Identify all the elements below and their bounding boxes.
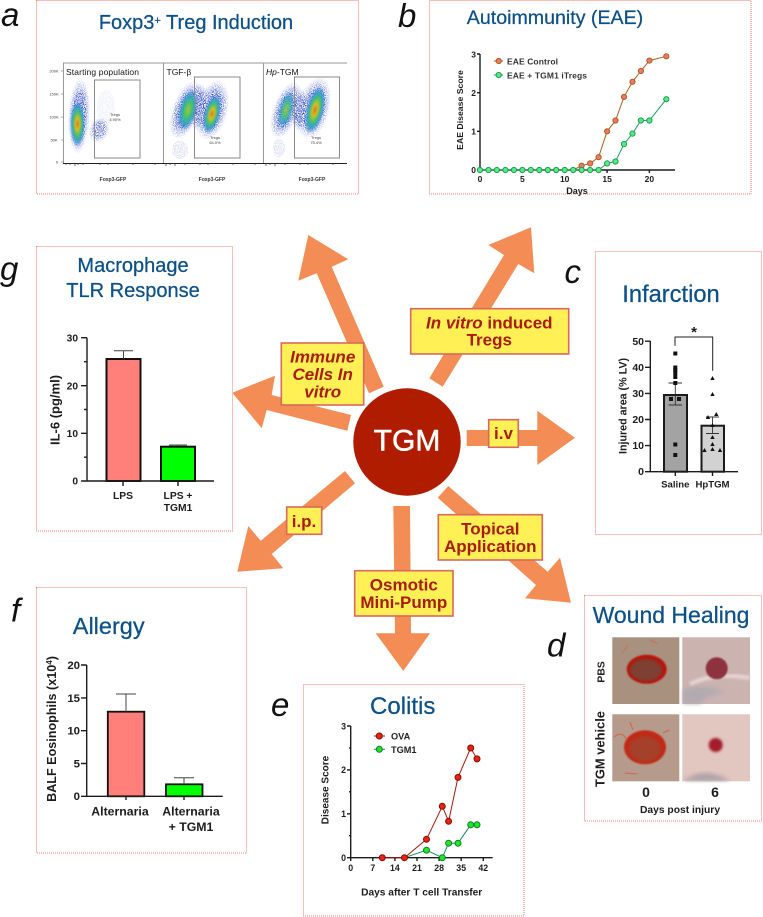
line chart colitis: 14 xyxy=(390,863,400,873)
plot 1 starting population: Foxp3-GFP xyxy=(100,177,127,183)
heading f: Allergy xyxy=(73,613,145,639)
arrow to infarction xyxy=(467,411,575,465)
flow y axis labels: 50K xyxy=(50,138,58,142)
TGM circle xyxy=(353,388,461,496)
bar chart IL-6: IL-6 (pg/ml) xyxy=(48,375,62,445)
bar chart eosinophils: 10 xyxy=(67,726,80,738)
line chart colitis: 1 xyxy=(341,809,346,819)
line chart colitis xyxy=(320,722,493,899)
bar chart eosinophils xyxy=(45,656,223,834)
bar chart eosinophils: 0 xyxy=(74,791,80,803)
line chart EAE: 0 xyxy=(471,165,476,175)
heading b: Autoimmunity (EAE) xyxy=(467,7,643,29)
label i.v: i.v xyxy=(494,424,513,443)
label topical application: Application xyxy=(444,537,537,556)
bar chart IL-6: 20 xyxy=(67,382,78,392)
legend EAE: EAE Control xyxy=(507,56,558,66)
bar chart IL-6 xyxy=(48,334,214,514)
line chart colitis: Disease Score xyxy=(320,755,332,824)
line chart EAE: 20 xyxy=(645,174,654,184)
heading a: Foxp3 xyxy=(99,12,154,34)
line chart colitis: 7 xyxy=(370,863,375,873)
flow y axis labels xyxy=(49,68,59,164)
line chart EAE: 2 xyxy=(471,88,476,98)
label i.p. xyxy=(287,507,322,534)
plot 1 starting population: Tregs xyxy=(110,112,120,117)
heading g: TLR Response xyxy=(66,280,200,302)
bar chart eosinophils: ) xyxy=(45,656,59,660)
significance bracket: * xyxy=(691,324,697,341)
label osmotic mini-pump: Mini-Pump xyxy=(360,593,447,612)
photo PBS day 6 xyxy=(682,637,750,704)
label topical application: Topical xyxy=(461,519,519,538)
label i.v xyxy=(489,420,518,447)
line chart colitis: 35 xyxy=(456,863,466,873)
heading g: Macrophage xyxy=(77,255,189,277)
legend colitis xyxy=(374,732,417,755)
bar chart injured area: 30 xyxy=(632,388,644,400)
bar chart IL-6: LPS + xyxy=(164,491,192,502)
legend EAE: EAE + TGM1 iTregs xyxy=(507,70,587,80)
label in vitro induced Tregs: Tregs xyxy=(467,331,512,350)
panel a: Foxp3 Treg induction xyxy=(1,0,358,194)
series EAE + TGM1 iTregs xyxy=(477,97,669,173)
letter c: c xyxy=(564,253,582,290)
line chart colitis: 2 xyxy=(341,765,346,775)
series OVA xyxy=(379,745,480,861)
central diagram: TGM with arrows xyxy=(232,227,575,671)
bar chart eosinophils: Alternaria xyxy=(162,804,220,818)
flow y axis labels: 150K xyxy=(49,92,59,96)
bar chart injured area: 40 xyxy=(632,362,644,374)
plot 2 TGF-beta xyxy=(162,67,240,183)
arrow to allergy xyxy=(237,471,355,572)
line chart colitis: 28 xyxy=(434,863,444,873)
label i.p.: i.p. xyxy=(292,512,316,531)
label immune cells in vitro xyxy=(281,343,364,405)
series EAE control xyxy=(573,54,669,170)
bar chart eosinophils: 20 xyxy=(67,660,80,672)
label osmotic mini-pump: Osmotic xyxy=(370,576,438,595)
significance bracket xyxy=(675,324,713,371)
panel c: infarction xyxy=(564,252,762,534)
line chart colitis: 3 xyxy=(341,722,346,732)
plot 1 starting population xyxy=(66,67,140,183)
panel g: macrophage TLR response xyxy=(0,246,232,531)
line chart EAE: 3 xyxy=(471,50,476,60)
plot 3 Hp-TGM: Foxp3-GFP xyxy=(299,177,326,183)
flow y axis labels: 200K xyxy=(49,68,59,74)
panel b: autoimmunity EAE xyxy=(398,0,751,196)
letter e: e xyxy=(271,686,289,723)
arrow to autoimmunity xyxy=(429,227,534,387)
arrow to macrophage panel left xyxy=(232,376,351,431)
flow cytometry plots xyxy=(49,63,347,183)
photo PBS day 0 xyxy=(612,637,679,704)
line chart colitis: Days after T cell Transfer xyxy=(361,888,482,899)
line chart colitis: 21 xyxy=(412,863,422,873)
plot 2 TGF-beta: Tregs xyxy=(210,135,220,140)
heading a: Treg Induction xyxy=(161,12,293,34)
line chart EAE: 10 xyxy=(560,174,570,184)
bar chart eosinophils: BALF Eosinophils (x10 xyxy=(45,665,59,802)
line chart EAE: 0 xyxy=(478,174,483,184)
arrow to macrophage panel up-left xyxy=(298,235,384,393)
bar chart IL-6: LPS xyxy=(113,491,133,502)
line chart EAE: 15 xyxy=(602,174,612,184)
bar chart injured area: 50 xyxy=(632,336,644,348)
bar chart injured area: Injured area (% LV) xyxy=(618,358,630,454)
label topical application xyxy=(438,515,542,560)
line chart EAE: 5 xyxy=(520,174,525,184)
line chart colitis: 42 xyxy=(478,863,488,873)
panel f: allergy xyxy=(11,588,246,853)
plot 3 Hp-TGM xyxy=(264,67,340,183)
heading e: Colitis xyxy=(370,693,435,720)
panel e: colitis xyxy=(271,684,524,916)
TGM circle: TGM xyxy=(374,425,440,458)
bar chart eosinophils: Alternaria xyxy=(91,804,149,818)
photo TGM vehicle day 6 xyxy=(682,714,750,781)
bar chart IL-6: 10 xyxy=(67,429,78,440)
bar chart IL-6: 0 xyxy=(72,476,78,488)
bar chart IL-6: TGM1 xyxy=(164,503,193,514)
arrow to colitis xyxy=(376,506,430,671)
label immune cells in vitro: vitro xyxy=(304,383,341,402)
legend EAE xyxy=(494,56,587,80)
label immune cells in vitro: Immune xyxy=(290,348,355,367)
bar chart injured area: 20 xyxy=(632,414,644,426)
row labels: TGM vehicle xyxy=(592,711,608,787)
heading d: Wound Healing xyxy=(593,602,749,628)
plot 3 Hp-TGM: 75.4% xyxy=(310,140,322,145)
line chart EAE: Days xyxy=(566,186,588,196)
line chart colitis: 0 xyxy=(348,863,353,873)
bar chart injured area xyxy=(618,324,738,491)
plot 3 Hp-TGM: Hp-TGM xyxy=(266,67,299,77)
plot 3 Hp-TGM: Tregs xyxy=(311,135,321,140)
letter d: d xyxy=(547,627,567,664)
label in vitro induced Tregs: In vitro induced xyxy=(426,313,553,332)
label immune cells in vitro: Cells In xyxy=(292,365,353,384)
bar chart injured area: 10 xyxy=(632,440,644,452)
legend colitis: OVA xyxy=(391,732,411,742)
series TGM1 xyxy=(404,822,480,861)
bar chart injured area: Saline xyxy=(661,480,689,491)
label in vitro induced Tregs xyxy=(411,309,569,354)
bar chart injured area: HpTGM xyxy=(695,480,730,491)
day labels: Days post injury xyxy=(640,805,720,816)
letter f: f xyxy=(11,592,24,629)
heading c: Infarction xyxy=(622,282,720,308)
line chart EAE xyxy=(455,50,675,196)
arrow to wound healing xyxy=(438,486,571,603)
flow y axis labels: 0 xyxy=(56,160,59,164)
line chart colitis: 0 xyxy=(341,853,346,863)
day labels xyxy=(640,784,720,816)
bar chart eosinophils: + TGM1 xyxy=(169,820,214,834)
line chart EAE: EAE Disease Score xyxy=(455,70,465,150)
panel d: wound healing xyxy=(547,596,762,821)
bar chart eosinophils: 4 xyxy=(45,660,54,665)
label osmotic mini-pump xyxy=(355,571,453,616)
photo TGM vehicle day 0 xyxy=(612,714,679,781)
bar chart IL-6: 30 xyxy=(67,334,78,344)
plot 1 starting population: 4.90% xyxy=(109,117,121,122)
plot 1 starting population: Starting population xyxy=(66,67,139,77)
letter g: g xyxy=(0,250,19,287)
line chart EAE: 1 xyxy=(471,126,476,136)
bar chart eosinophils: 5 xyxy=(74,758,81,770)
bar chart injured area: 0 xyxy=(638,466,644,478)
heading a: + xyxy=(154,15,161,27)
plot 2 TGF-beta: TGF-β xyxy=(166,67,191,77)
legend colitis: TGM1 xyxy=(391,745,417,755)
day labels: 0 xyxy=(642,784,650,800)
flow y axis labels: 100K xyxy=(49,114,59,120)
row labels: PBS xyxy=(596,661,608,683)
row labels xyxy=(592,661,608,787)
plot 2 TGF-beta: Foxp3-GFP xyxy=(199,177,226,183)
plot 2 TGF-beta: 64.0% xyxy=(209,140,221,145)
bar chart eosinophils: 15 xyxy=(67,693,81,705)
day labels: 6 xyxy=(711,784,719,800)
